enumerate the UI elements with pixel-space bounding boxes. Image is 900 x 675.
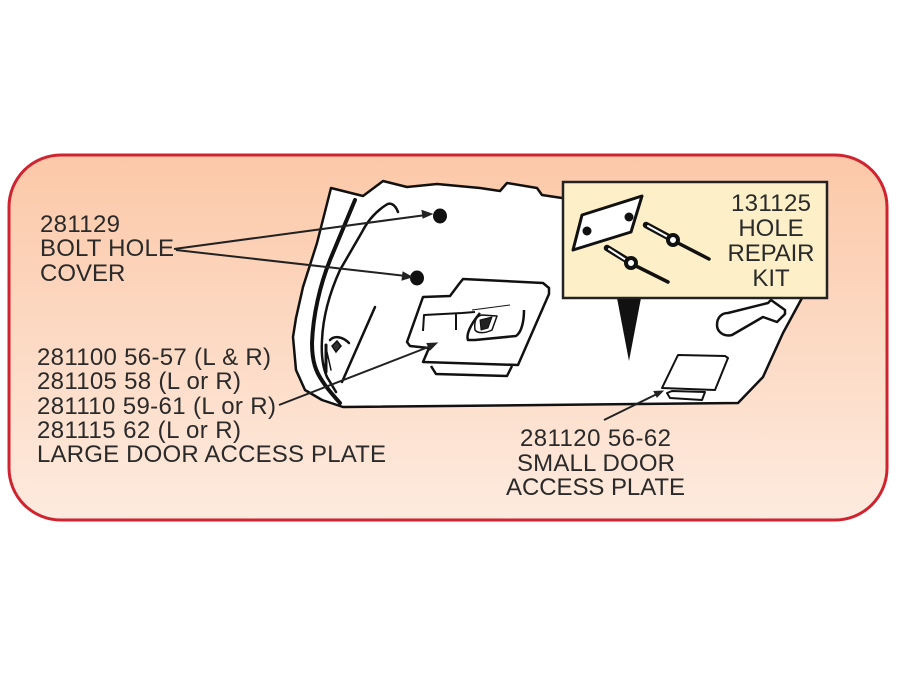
icon: lower bolt hole	[410, 270, 424, 286]
label: bolt hole cover	[40, 211, 174, 287]
arrow: to small plate	[604, 391, 663, 420]
callout label: KIT	[752, 265, 790, 292]
label: large door access plate: LARGE DOOR ACCESS PLATE	[37, 441, 386, 468]
callout label: 131125	[731, 190, 811, 217]
label: small door access plate: ACCESS PLATE	[506, 474, 685, 501]
icon: rivet lower	[607, 248, 668, 282]
label: small door access plate: 281120 56-62	[520, 425, 671, 452]
arrow: to large plate	[279, 343, 437, 405]
callout label: REPAIR	[728, 240, 814, 267]
panel: rounded background	[9, 155, 887, 520]
callout box	[563, 182, 827, 298]
label: small door access plate	[506, 425, 685, 501]
icon: repair plate	[573, 196, 642, 250]
callout label	[728, 190, 814, 292]
large door access plate	[407, 279, 549, 376]
door panel outline	[293, 181, 802, 407]
label: bolt hole cover: BOLT HOLE	[40, 235, 174, 262]
small door access plate	[662, 355, 728, 400]
label: small door access plate: SMALL DOOR	[517, 450, 675, 477]
pointer wedge	[617, 298, 641, 361]
label: large door access plate: 281110 59-61 (L or R)	[37, 393, 276, 420]
icon: upper bolt hole	[433, 208, 447, 224]
arrow: to upper bolt hole	[174, 210, 432, 249]
label: bolt hole cover: COVER	[40, 260, 125, 287]
label: bolt hole cover: 281129	[40, 211, 120, 238]
label: large door access plate: 281115 62 (L or R)	[37, 417, 241, 444]
door handle	[717, 300, 785, 335]
callout: hole repair kit	[563, 182, 827, 298]
callout label: HOLE	[738, 215, 804, 242]
door illustration	[293, 181, 802, 407]
label: large door access plate: 281100 56-57 (L & R)	[37, 344, 271, 371]
label: large door access plate	[37, 344, 386, 468]
leader arrows	[174, 210, 663, 420]
label: large door access plate: 281105 58 (L or R)	[37, 368, 241, 395]
icon: rivet upper	[646, 225, 709, 259]
arrow: to lower bolt hole	[176, 250, 412, 280]
door edge channel lines	[312, 200, 398, 403]
